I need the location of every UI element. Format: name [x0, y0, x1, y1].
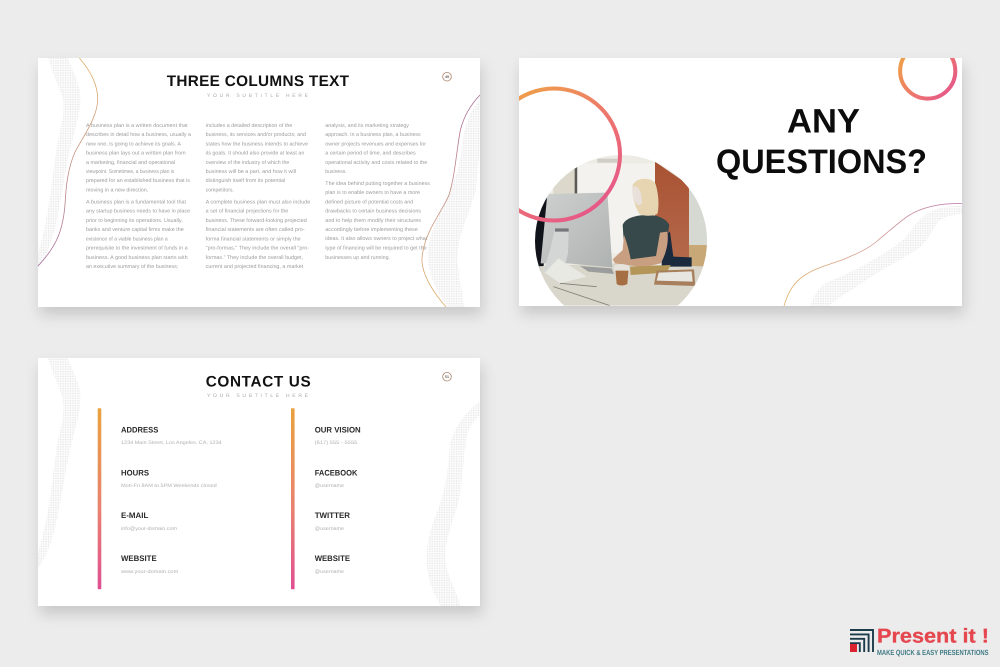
column 3 text: businesses up and running. [325, 255, 390, 261]
panel: contact us slide [37, 358, 481, 607]
contact: twitter [315, 511, 350, 532]
column 1 text: describes in detail how a business, usually a [86, 132, 191, 138]
title: CONTACT US [206, 374, 311, 391]
column 3 text: The idea behind putting together a business [325, 181, 430, 187]
curve left [38, 57, 98, 266]
column 2 text: formas." They include the overall budget, [206, 255, 303, 261]
column 2 text: its goals. It should also provide at least an [206, 150, 304, 156]
column 1 text: A business plan is a written document that [86, 123, 188, 129]
contact: address [121, 426, 222, 446]
dotted band right [427, 401, 481, 607]
column 2 text: business will be a part, and how it will [206, 169, 296, 175]
column 3 text: plan is to enable owners to have a more [325, 190, 420, 196]
large gradient ring [519, 86, 622, 222]
column 2 text: competitors. [206, 188, 234, 194]
contact: website: www.your-domain.com [121, 569, 178, 575]
column 3 text: operational activity and costs related to the [325, 160, 427, 166]
contact: hours: Mon-Fri 8AM to 5PM Weekends closed [121, 483, 217, 489]
dotted band left [37, 58, 80, 268]
contact: our vision: OUR VISION [315, 426, 361, 434]
column 1 text [86, 123, 191, 270]
contact: address: 1234 Main Street, Los Angeles, CA, 1234 [121, 440, 222, 446]
column 3 text: business. [325, 169, 347, 175]
logo wordmark: Present it ! [877, 626, 989, 648]
column 3 text: a certain period of time, and describes [325, 150, 416, 156]
column 1 text: prior to beginning its operations. Usually, [86, 218, 183, 224]
column 3 text: analysis, and its marketing strategy [325, 123, 409, 129]
column 1 text: banks and venture capital firms make the [86, 227, 184, 233]
dotted band left [37, 358, 80, 568]
contact: hours [121, 468, 217, 489]
panel: three columns text slide [37, 57, 481, 308]
contact: address: ADDRESS [121, 426, 159, 434]
column 2 text: business, its services and/or products; and [206, 132, 306, 138]
column 1 text: business plan lays out a written plan from [86, 150, 186, 156]
curve right [422, 94, 481, 308]
left gradient bar [98, 408, 101, 589]
subtitle: YOUR SUBTITLE HERE [207, 93, 309, 99]
column 3 text: and to help them modify their structures [325, 218, 421, 224]
column 1 text: a marketing, financial and operational [86, 160, 175, 166]
column 2 text: distinguish itself from its potential [206, 178, 285, 184]
column 2 text [206, 123, 310, 270]
icon: nested squares [850, 630, 873, 652]
column 3 text: accordingly before implementing these [325, 227, 418, 233]
page number badge [443, 372, 451, 381]
column 1 text: prepared for an established business that is [86, 178, 190, 184]
contact: facebook [315, 468, 358, 489]
panel: any questions slide [488, 43, 963, 310]
column 2 text: a set of financial projections for the [206, 209, 288, 215]
contact: website 2 [315, 554, 351, 575]
contact: website [121, 554, 178, 575]
contact: website 2: WEBSITE [315, 554, 351, 563]
column 3 text: owner projects revenues and expenses for [325, 141, 426, 147]
column 2 text: includes a detailed description of the [206, 123, 292, 129]
column 2 text: forma financial statements or simply the [206, 236, 301, 242]
contact: website: WEBSITE [121, 554, 157, 563]
page number badge [443, 72, 451, 81]
column 1 text: prerequisite to the investment of funds in a [86, 246, 188, 252]
column 2 text: A complete business plan must also include [206, 200, 310, 206]
contact: facebook: @username [315, 483, 344, 489]
photo: woman at desk [535, 155, 707, 306]
contact: our vision: (617) 555 - 5555 [315, 440, 358, 446]
contact: e-mail: info@your-domain.com [121, 526, 177, 532]
logo: present it [850, 626, 989, 657]
column 1 text: existence of a viable business plan a [86, 236, 168, 242]
column 1 text: new one, is going to achieve its goals. A [86, 141, 181, 147]
column 1 text: viewpoint. Sometimes, a business plan is [86, 169, 175, 175]
column 3 text: approach. In a business plan, a business [325, 132, 421, 138]
contact: e-mail: E-MAIL [121, 511, 148, 520]
page number badge: 49 [445, 75, 449, 79]
dotted band right [428, 98, 481, 307]
contact: website 2: @username [315, 569, 344, 575]
column 2 text: financial statements are often called pro- [206, 227, 305, 233]
column 2 text: overview of the industry of which the [206, 160, 289, 166]
column 3 text: type of financing will be required to get the [325, 246, 427, 252]
title: THREE COLUMNS TEXT [167, 73, 350, 90]
column 2 text: business. These forward-looking projected [206, 218, 307, 224]
column 2 text: "pro-formas." They include the overall "pro- [206, 246, 309, 252]
subtitle: YOUR SUBTITLE HERE [207, 393, 309, 399]
heading: any questions: QUESTIONS? [716, 143, 927, 181]
contact: e-mail [121, 511, 177, 532]
column 3 text: ideas. It also allows owners to project what [325, 236, 428, 242]
heading: any questions: ANY [787, 103, 860, 141]
right gradient bar [291, 408, 295, 589]
curve [784, 203, 963, 306]
column 1 text: any startup business needs to have in place [86, 209, 190, 215]
contact: twitter: @username [315, 526, 344, 532]
contact: facebook: FACEBOOK [315, 468, 358, 477]
column 3 text [325, 123, 430, 261]
dotted band [810, 206, 963, 306]
column 1 text: moving in a new direction. [86, 188, 148, 194]
page number badge: 51 [445, 375, 449, 379]
contact: our vision [315, 426, 361, 446]
column 2 text: current and projected financing, a market [206, 264, 304, 270]
contact: hours: HOURS [121, 468, 150, 477]
column 3 text: drawbacks to certain business decisions [325, 208, 421, 214]
column 3 text: defined picture of potential costs and [325, 199, 413, 205]
column 2 text: states how the business intends to achieve [206, 141, 308, 147]
column 1 text: business. A good business plan starts with [86, 255, 188, 261]
column 1 text: an executive summary of the business; [86, 264, 178, 270]
column 1 text: A business plan is a fundamental tool that [86, 200, 187, 206]
heading: any questions [716, 103, 927, 181]
small gradient ring [898, 58, 958, 101]
contact: twitter: TWITTER [315, 511, 350, 520]
